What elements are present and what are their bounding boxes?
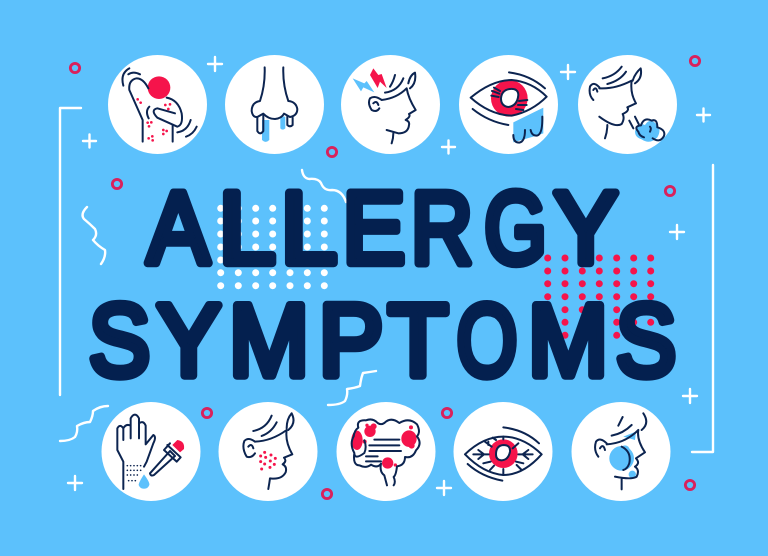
title: ALLERGY SYMPTOMS: O: [457, 284, 517, 398]
title: ALLERGY SYMPTOMS: E: [343, 170, 405, 285]
title: ALLERGY SYMPTOMS: L: [219, 171, 276, 285]
icon: coughing profile: [578, 55, 677, 154]
title: ALLERGY SYMPTOMS: [89, 170, 676, 398]
title: ALLERGY SYMPTOMS: R: [411, 171, 473, 284]
title: ALLERGY SYMPTOMS: P: [319, 284, 383, 398]
icon: bloodshot eye: [454, 402, 552, 501]
title: ALLERGY SYMPTOMS: Y: [554, 170, 618, 284]
title: ALLERGY SYMPTOMS: A: [147, 171, 209, 285]
icon: runny nose: [225, 55, 324, 154]
title: ALLERGY SYMPTOMS: L: [281, 170, 337, 285]
squiggle accents: [60, 170, 376, 441]
title: ALLERGY SYMPTOMS: Y: [157, 283, 221, 397]
title: ALLERGY SYMPTOMS: S: [616, 284, 676, 398]
decorative rings: [70, 56, 700, 499]
icon: scratching itchy rash: [108, 55, 207, 154]
title: ALLERGY SYMPTOMS: G: [484, 172, 547, 285]
right corner bracket: [692, 165, 713, 452]
title: ALLERGY SYMPTOMS: M: [229, 284, 309, 398]
title: ALLERGY SYMPTOMS: T: [388, 284, 448, 398]
red dot grid: [544, 254, 654, 339]
icon: facial rash: [218, 402, 318, 501]
decorative plus signs: [68, 57, 710, 495]
left corner bracket: [60, 108, 81, 395]
icon: headache with lightning: [341, 55, 440, 154]
white dot grid: [217, 205, 328, 289]
title: ALLERGY SYMPTOMS: S: [89, 283, 150, 398]
title: ALLERGY SYMPTOMS: M: [528, 284, 608, 398]
icon: inflamed intestines: [336, 402, 436, 501]
icon: red watery eye: [459, 55, 558, 154]
icon: hand skin test with dropper: [102, 402, 200, 501]
icon: swollen face: [572, 402, 670, 501]
